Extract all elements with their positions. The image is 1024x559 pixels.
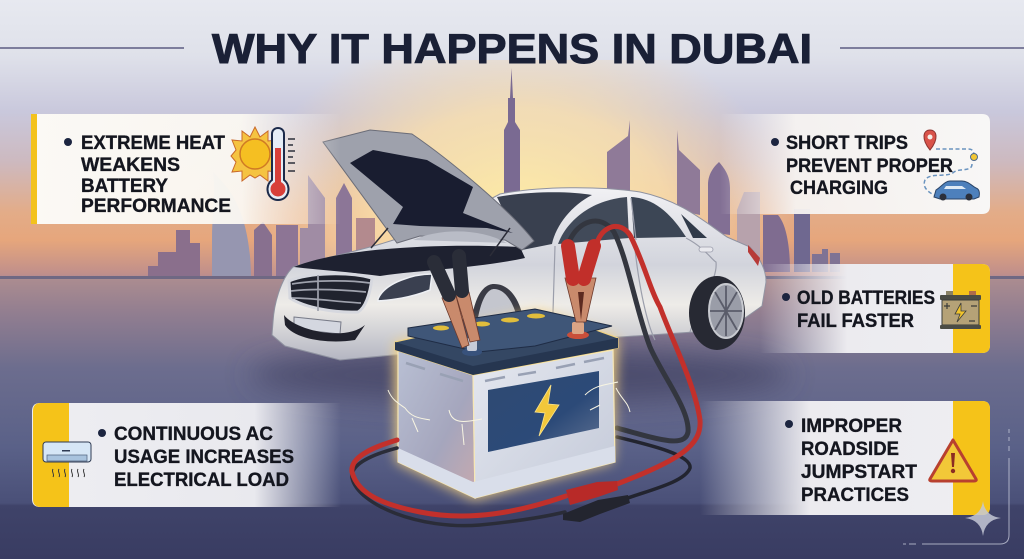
black connector	[563, 495, 630, 522]
text block: OLD BATTERIES	[797, 288, 935, 309]
battery glow	[394, 310, 618, 500]
text block	[81, 133, 231, 217]
accent block	[953, 264, 990, 353]
headlight	[378, 274, 432, 301]
text block: EXTREME HEAT	[81, 133, 225, 154]
text block: ELECTRICAL LOAD	[114, 470, 289, 491]
text block: USAGE INCREASES	[114, 447, 294, 468]
text block: PREVENT PROPER	[786, 156, 953, 177]
black cable lower loop	[617, 437, 690, 499]
lightning bolt	[535, 385, 559, 436]
text block: BATTERY	[81, 176, 168, 197]
license plate	[294, 317, 341, 334]
horizon line	[0, 276, 1024, 279]
text block: FAIL FASTER	[797, 311, 914, 332]
text block	[801, 416, 917, 506]
side windows	[558, 197, 629, 244]
road shadow	[250, 347, 790, 403]
accent block	[953, 401, 990, 515]
text block: WEAKENS	[81, 155, 180, 176]
jumper cables behind battery	[570, 221, 700, 499]
panel: old batteries	[760, 264, 990, 353]
text block	[786, 133, 953, 199]
battery cover	[408, 309, 612, 352]
front wheel	[470, 284, 525, 345]
battery lid	[395, 310, 618, 375]
bullet	[785, 420, 793, 428]
black cable front	[352, 448, 565, 526]
panel: short trips	[720, 114, 990, 214]
windshield	[497, 192, 592, 250]
text block	[114, 424, 294, 491]
car body	[272, 188, 766, 360]
open hood	[323, 130, 534, 250]
bullet	[771, 138, 779, 146]
text block: IMPROPER	[801, 416, 902, 437]
icon: air conditioner	[43, 442, 91, 477]
red connector	[566, 481, 618, 505]
text block	[797, 288, 935, 332]
text block: ROADSIDE	[801, 439, 899, 460]
vents	[406, 358, 604, 381]
ground	[0, 279, 1024, 559]
battery	[388, 309, 630, 500]
black cable	[570, 221, 688, 441]
background: sun glow	[180, 60, 860, 280]
door lines	[552, 198, 716, 345]
panel: extreme heat	[31, 114, 341, 224]
text block: JUMPSTART	[801, 462, 917, 483]
bullet	[98, 429, 106, 437]
grille	[289, 274, 372, 312]
bullet	[64, 138, 72, 146]
red clamps	[565, 246, 596, 322]
icon: route pin	[924, 130, 978, 195]
hood struts	[371, 228, 510, 256]
battery base	[398, 446, 615, 498]
red cable	[597, 226, 700, 484]
black clamps	[434, 256, 480, 348]
icon: old battery	[940, 291, 981, 329]
battery left face	[398, 350, 475, 498]
panel: improper jumpstart	[700, 401, 990, 515]
title rule left	[0, 47, 184, 49]
icon: sun	[231, 127, 282, 181]
icon: thermometer	[267, 128, 295, 200]
battery right face	[473, 350, 615, 498]
lower intake	[284, 315, 365, 341]
sparks	[388, 382, 630, 445]
tail light	[748, 245, 760, 266]
title: WHY IT HAPPENS IN DUBAI	[212, 25, 812, 72]
red cable front	[352, 440, 566, 516]
terminals	[462, 348, 482, 356]
accent bar	[31, 114, 37, 224]
sparkle watermark	[965, 501, 1001, 536]
text block: PRACTICES	[801, 485, 909, 506]
icon: warning triangle	[930, 440, 976, 481]
visible glass under hood	[413, 231, 507, 243]
hood liner	[350, 150, 513, 233]
closed hood dark front	[294, 246, 525, 276]
skyline of Dubai	[148, 68, 840, 276]
rear wheel	[689, 276, 745, 350]
accent block	[33, 403, 69, 507]
battery caps	[433, 314, 545, 330]
door handle	[699, 247, 713, 252]
panel: continuous AC	[32, 403, 341, 507]
icon: blue car	[934, 181, 979, 200]
bullet	[782, 293, 790, 301]
text block: PERFORMANCE	[81, 196, 231, 217]
text block: SHORT TRIPS	[786, 133, 908, 154]
text block: CONTINUOUS AC	[114, 424, 273, 445]
corner bracket mark	[903, 429, 1009, 544]
jumper cables in front of battery	[352, 440, 566, 526]
car with open hood	[272, 130, 766, 360]
text block: CHARGING	[790, 178, 888, 199]
battery front panel	[488, 371, 599, 452]
title rule right	[840, 47, 1024, 49]
